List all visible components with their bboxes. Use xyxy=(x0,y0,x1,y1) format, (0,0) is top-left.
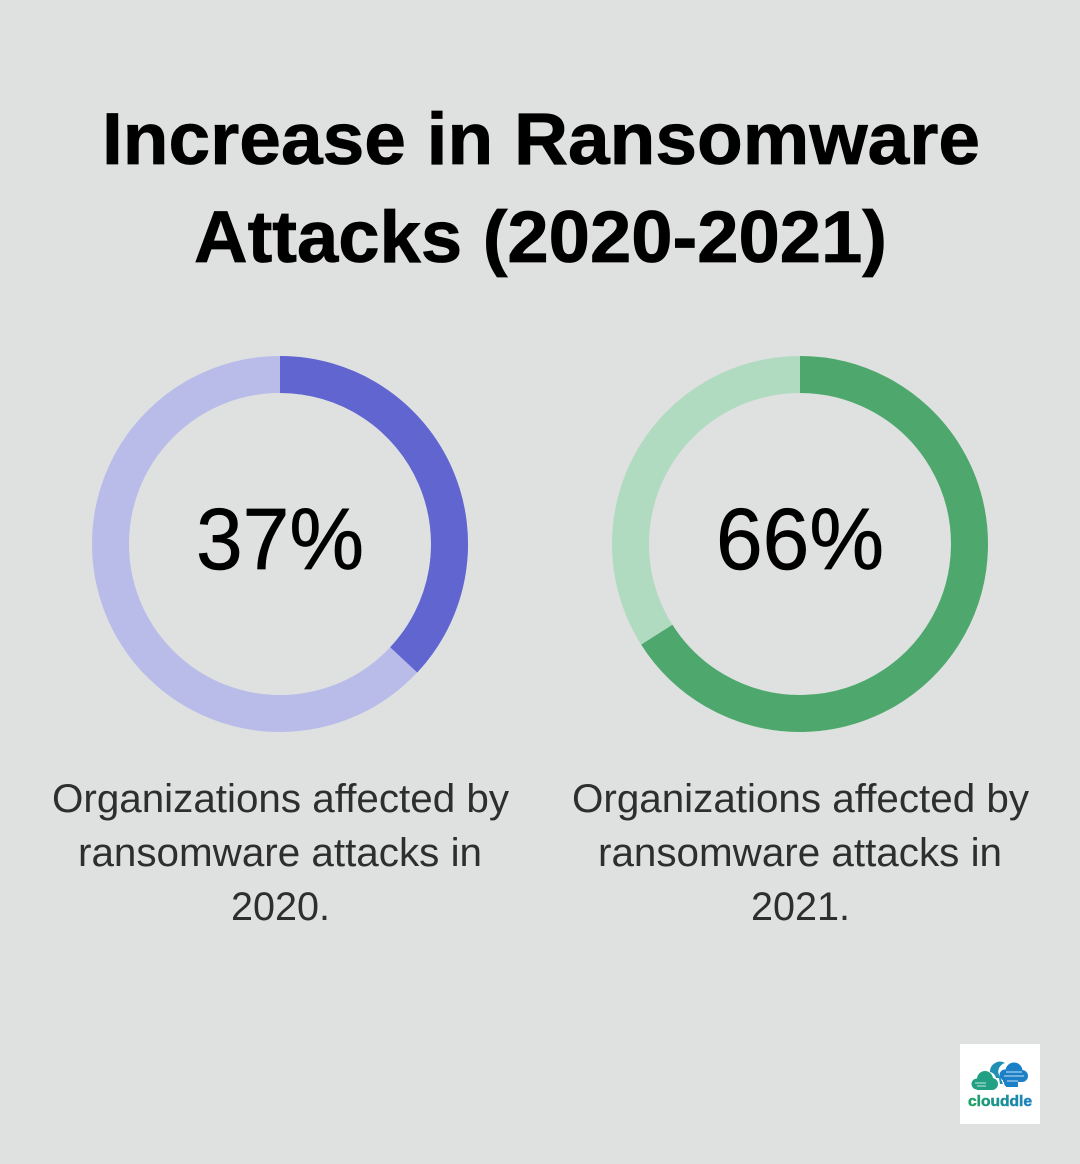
donut chart: 37% xyxy=(110,374,450,714)
panel: 2021 statistic xyxy=(572,374,1029,929)
description 2021: 2021. xyxy=(751,885,850,929)
description 2021: Organizations affected by xyxy=(572,777,1029,821)
donut chart: 66% xyxy=(630,374,970,714)
panel: 2020 statistic xyxy=(52,374,509,929)
description 2020 xyxy=(52,777,509,929)
description 2021 xyxy=(572,777,1029,929)
logo: clouddle xyxy=(960,1044,1040,1124)
title: Attacks (2020-2021) xyxy=(194,197,887,278)
description 2021: ransomware attacks in xyxy=(598,831,1002,875)
logo wordmark: clouddle xyxy=(968,1094,1032,1110)
description 2020: 2020. xyxy=(231,885,330,929)
title xyxy=(102,99,980,278)
value: 66%: 66% xyxy=(716,491,884,588)
icon: clouds xyxy=(972,1062,1028,1090)
title: Increase in Ransomware xyxy=(102,99,980,180)
description 2020: ransomware attacks in xyxy=(78,831,482,875)
description 2020: Organizations affected by xyxy=(52,777,509,821)
value: 37%: 37% xyxy=(196,491,364,588)
